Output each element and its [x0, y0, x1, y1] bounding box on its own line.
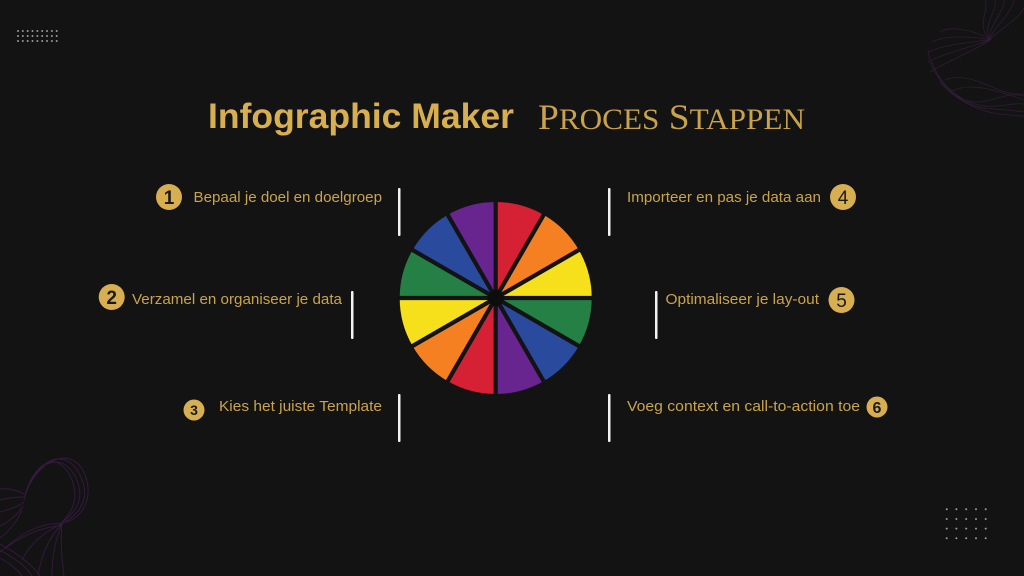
step 6: Voeg context en call-to-action toe: [627, 398, 860, 415]
step 4: 4: [838, 188, 849, 209]
step 2: [99, 284, 354, 339]
step 1: [156, 184, 400, 236]
step 5: Optimaliseer je lay-out: [666, 291, 820, 308]
title: Infographic Maker: Infographic Maker: [208, 97, 514, 136]
step 3: 3: [190, 402, 198, 418]
step 5: 5: [836, 291, 847, 312]
step 2: Verzamel en organiseer je data: [132, 291, 343, 308]
step 4: [608, 184, 856, 236]
step 4: Importeer en pas je data aan: [627, 189, 821, 206]
decoration: purple wave top right: [928, 0, 1024, 116]
decoration: purple wave bottom left: [0, 458, 88, 576]
step 6: 6: [873, 400, 882, 417]
pie wheel: twelve colored segments: [398, 200, 594, 396]
decoration: dot grid top left: [17, 30, 58, 42]
step 1: 1: [164, 188, 175, 209]
step 2: 2: [106, 288, 117, 309]
title: Proces Stappen: PROCES STAPPEN: [538, 97, 805, 137]
step 3: [184, 394, 400, 442]
step 1: Bepaal je doel en doelgroep: [194, 189, 382, 206]
step 3: Kies het juiste Template: [219, 398, 382, 415]
step 5: [655, 287, 854, 339]
decoration: dot grid bottom right: [946, 508, 987, 539]
step 6: [608, 394, 888, 442]
title: [208, 97, 805, 137]
